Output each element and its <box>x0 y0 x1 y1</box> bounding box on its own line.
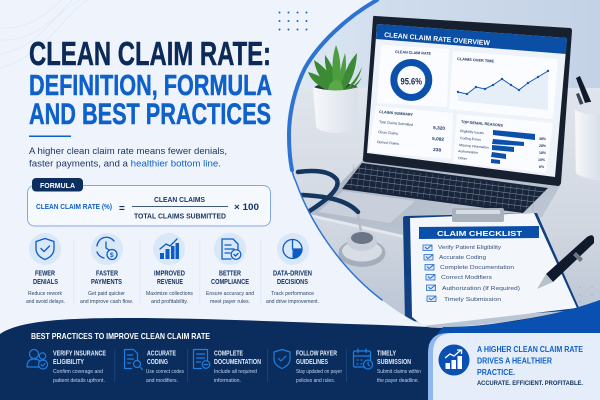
top denial reasons: Missing Information <box>459 143 489 150</box>
formula pill: FORMULA <box>40 181 76 190</box>
faint dots <box>579 286 593 303</box>
subtitle <box>29 146 227 170</box>
practice: verify insurance eligibility <box>27 350 106 384</box>
title: DEFINITION, FORMULA <box>29 70 272 102</box>
benefit: better compliance: BETTER <box>219 268 241 278</box>
benefit: improved revenue: REVENUE <box>157 277 183 286</box>
subtitle: faster payments, and a healthier bottom line. <box>29 158 221 170</box>
checklist items: Verify Patient Eligibility <box>438 245 502 251</box>
practice: follow payer guidelines: GUIDELINES <box>296 359 328 366</box>
practice: timely submission <box>354 349 421 384</box>
checklist items: Timely Submission <box>444 297 501 303</box>
benefit: data-driven decisions: Track performance <box>271 291 314 297</box>
benefit: faster payments: FASTER <box>96 268 118 278</box>
section heading: best practices: BEST PRACTICES TO IMPROVE CLEAN CLAIM RATE <box>31 331 210 341</box>
benefit: better compliance: meet payer rules. <box>210 299 250 305</box>
formula text: CLEAN CLAIM RATE (%) <box>36 204 112 211</box>
keyboard keys <box>346 168 544 207</box>
practice: verify insurance eligibility: VERIFY INSURANCE <box>53 350 106 358</box>
benefit: data-driven decisions: and drive improvement. <box>266 299 319 305</box>
top denial reasons: 18% <box>539 151 547 155</box>
checklist items: Accurate Coding <box>439 255 486 261</box>
benefit: fewer denials: Reduce rework <box>28 291 62 297</box>
benefit: fewer denials: DENIALS <box>33 277 58 286</box>
practice: follow payer guidelines <box>274 350 342 384</box>
practice: accurate coding <box>124 350 184 384</box>
benefit: faster payments: Get paid quicker <box>88 291 125 297</box>
practice: complete documentation: DOCUMENTATION <box>214 359 261 366</box>
practice: verify insurance eligibility: Confirm coverage and <box>53 369 103 375</box>
best practices band <box>0 300 600 400</box>
benefit: data-driven decisions <box>266 233 319 305</box>
dot grid <box>278 12 308 30</box>
checklist items: Authorization (If Required) <box>442 286 520 292</box>
practice: verify insurance eligibility: patient details upfront. <box>53 378 105 384</box>
pen cup <box>574 76 600 180</box>
formula text: CLEAN CLAIMS <box>154 197 205 204</box>
pen <box>537 235 594 289</box>
title <box>29 36 272 131</box>
claims summary: Denied Claims <box>377 140 399 146</box>
callout text <box>477 345 584 387</box>
claims summary: CLAIMS SUMMARY <box>379 110 414 117</box>
benefit: improved revenue <box>146 233 193 305</box>
callout text: A HIGHER CLEAN CLAIM RATE <box>477 345 584 354</box>
practice: accurate coding: ACCURATE <box>147 350 176 358</box>
laptop screen <box>363 16 572 186</box>
benefit: faster payments: and improve cash flow. <box>80 299 133 305</box>
top denial reasons: 38% <box>539 137 547 141</box>
callout text: PRACTICE. <box>477 368 515 377</box>
callout text: ACCURATE. EFFICIENT. PROFITABLE. <box>477 380 583 387</box>
formula text: = <box>119 204 125 214</box>
top denial reasons: 6% <box>539 165 545 169</box>
practice: accurate coding: Use correct codes <box>146 369 184 375</box>
dashboard header: CLEAN CLAIM RATE OVERVIEW <box>384 32 490 47</box>
checklist items: Complete Documentation <box>440 265 514 271</box>
practice: complete documentation <box>194 350 261 384</box>
claims summary <box>377 110 446 153</box>
benefit: data-driven decisions: DECISIONS <box>277 277 308 286</box>
benefit dividers <box>74 239 261 305</box>
practice: follow payer guidelines: policies and rules. <box>296 378 335 384</box>
formula box <box>28 178 270 226</box>
title: AND BEST PRACTICES <box>29 98 271 131</box>
benefit: improved revenue: Maximize collections <box>146 291 193 297</box>
laptop base <box>310 160 560 240</box>
claims summary: 238 <box>433 147 442 153</box>
top denial reasons: Eligibility Issues <box>460 129 485 135</box>
practice: follow payer guidelines: Stay updated on payer <box>296 369 342 375</box>
top denial reasons: 28% <box>539 144 547 148</box>
practice: follow payer guidelines: FOLLOW PAYER <box>296 350 337 358</box>
practice: accurate coding: and modifiers. <box>146 378 178 384</box>
dashboard header <box>376 24 567 54</box>
practice: complete documentation: Include all required <box>214 369 257 375</box>
callout text: DRIVES A HEALTHIER <box>477 356 552 366</box>
donut chart <box>394 50 432 98</box>
formula text: TOTAL CLAIMS SUBMITTED <box>134 214 226 220</box>
practice: timely submission: the payer deadline. <box>377 378 419 384</box>
benefit: faster payments: $ <box>110 252 114 259</box>
benefit: faster payments <box>80 233 133 305</box>
benefit: fewer denials: and avoid delays. <box>26 299 65 305</box>
practice: complete documentation: information. <box>214 378 241 384</box>
benefit: better compliance: Ensure accuracy and <box>206 291 254 297</box>
benefit: better compliance: COMPLIANCE <box>211 277 249 286</box>
benefit: data-driven decisions: DATA-DRIVEN <box>273 268 312 278</box>
dashboard cards <box>368 45 558 173</box>
benefit: improved revenue: and profitability. <box>151 299 188 305</box>
practice: timely submission: Submit claims within <box>377 369 421 375</box>
practice: accurate coding: CODING <box>147 359 168 366</box>
checklist items <box>438 245 520 303</box>
benefit: better compliance <box>206 233 254 305</box>
donut chart: CLEAN CLAIM RATE <box>395 50 432 56</box>
practice: verify insurance eligibility: ELIGIBILITY <box>53 359 84 366</box>
clipboard clip <box>452 208 504 222</box>
decorative contour lines <box>0 0 90 68</box>
checkboxes <box>423 245 436 302</box>
claims summary: Total Claims Submitted <box>379 120 413 127</box>
stethoscope <box>298 171 386 267</box>
checklist header: CLAIM CHECKLIST <box>437 229 523 238</box>
practice: timely submission: SUBMISSION <box>377 359 411 366</box>
formula text <box>36 197 259 220</box>
clipboard <box>403 208 580 326</box>
claims summary: 5,320 <box>433 125 446 131</box>
subtitle: A higher clean claim rate means fewer denials, <box>29 146 227 157</box>
plant <box>308 45 362 133</box>
line chart <box>457 57 549 110</box>
photo: desk scene <box>280 0 600 333</box>
top denial reasons: TOP DENIAL REASONS <box>461 120 504 128</box>
top denial reasons: Coding Errors <box>460 136 482 142</box>
top denial reasons: 10% <box>538 158 546 162</box>
checklist header <box>419 226 539 239</box>
top denial reasons <box>458 120 547 169</box>
practice dividers <box>114 349 347 382</box>
checklist items: Correct Modifiers <box>441 275 493 281</box>
practice: complete documentation: COMPLETE <box>214 350 243 358</box>
benefit: improved revenue: IMPROVED <box>154 268 186 278</box>
line chart: CLAIMS OVER TIME <box>457 57 495 64</box>
practice: timely submission: TIMELY <box>377 350 396 358</box>
formula text: × 100 <box>234 202 259 212</box>
benefit: faster payments: PAYMENTS <box>91 277 122 286</box>
photo arc <box>289 0 382 300</box>
donut chart: 95.6% <box>400 76 422 88</box>
title: CLEAN CLAIM RATE: <box>29 36 271 73</box>
formula pill <box>32 178 83 192</box>
claims summary: 5,082 <box>432 136 445 142</box>
top denial reasons: Other <box>458 156 468 161</box>
blue accent behind callout <box>428 300 600 345</box>
title rule <box>29 136 71 137</box>
claims summary: Clean Claims <box>378 130 398 136</box>
callout icon <box>438 344 470 376</box>
benefit: fewer denials <box>26 233 65 305</box>
benefit: fewer denials: FEWER <box>35 268 55 278</box>
top denial reasons: Authorization <box>458 149 478 155</box>
callout panel <box>428 333 600 400</box>
